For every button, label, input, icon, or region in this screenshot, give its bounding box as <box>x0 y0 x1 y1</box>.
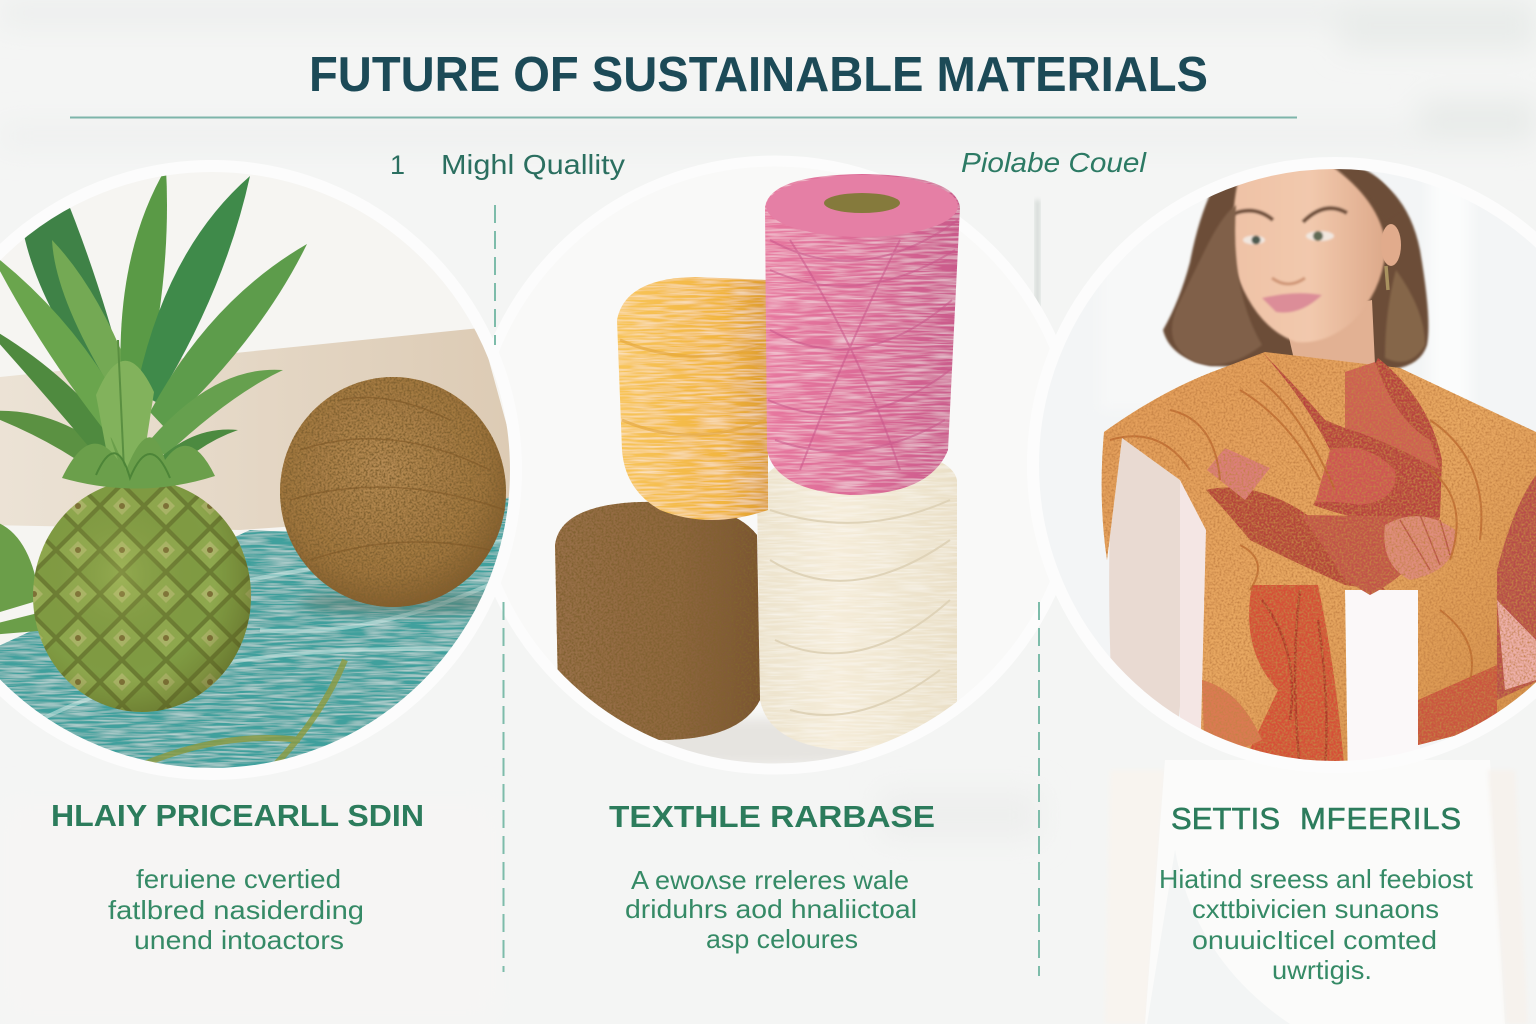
hair back <box>1163 162 1428 370</box>
label: piolabe couel: Piolabe Couel <box>961 147 1147 178</box>
column 2: description: A ewoʌse rreleres wale <box>631 865 909 895</box>
column 3: description: Hiatind sreess anl feebiost <box>1159 864 1474 894</box>
title: FUTURE OF SUSTAINABLE MATERIALS <box>309 48 1208 102</box>
spool: pink yarn <box>765 174 960 495</box>
scarf: red neck fold <box>1262 352 1442 521</box>
hair strands front <box>1172 205 1262 365</box>
panel: left circle, pineapple and coconut fibre <box>0 166 530 790</box>
spool: yellow fibre <box>617 277 768 520</box>
column 3: heading <box>1171 801 1461 836</box>
column 2: heading: TEXTHLE RARBASE <box>609 799 935 834</box>
column 1: description: feruiene cvertied <box>136 864 341 894</box>
figure below portrait: white blouse and sleeve <box>1105 760 1528 1024</box>
scarf: pink ruffle <box>1384 516 1455 580</box>
pineapple body <box>30 478 255 718</box>
column 2: description: asp celoures <box>706 924 858 954</box>
scarf: lower right petal <box>1418 665 1497 745</box>
column 2: description <box>625 865 917 954</box>
coconut fibre ball <box>280 377 506 615</box>
neck <box>1289 300 1375 364</box>
panel: centre circle, textile fibre spools <box>555 156 1041 764</box>
column 1: description: fatlbred nasiderding <box>108 895 364 925</box>
column 2: description: driduhrs aod hnaliictoal <box>625 894 917 924</box>
face <box>1233 163 1400 342</box>
column 1: description: unend intoactors <box>134 925 344 955</box>
scarf: lower left petal <box>1249 585 1344 761</box>
teal woven cloth <box>0 497 509 768</box>
column 1: description <box>108 864 364 955</box>
label: high quality: 1 <box>390 150 405 180</box>
scarf: far right panel <box>1497 470 1536 700</box>
pineapple crown leaves <box>0 168 307 489</box>
green leaf behind fruit <box>0 524 38 634</box>
white top <box>1180 480 1206 729</box>
spool: brown fibre block <box>555 502 760 740</box>
ear and earring <box>1381 224 1401 290</box>
bare sleeve <box>1109 438 1180 716</box>
dashed column dividers <box>495 205 1039 976</box>
scarf: red diagonal band <box>1206 488 1385 590</box>
column 3: description: cxttbivicien sunaons <box>1192 894 1439 924</box>
label: high quality: Mighl Quallity <box>441 149 625 180</box>
column 3: heading: SETTIS <box>1171 801 1280 836</box>
spool: cream fibre <box>757 450 957 751</box>
column 1: heading: HLAIY PRICEARLL SDIN <box>51 798 424 833</box>
column 3: description: onuuicIticel comted <box>1192 925 1437 955</box>
column 3: description <box>1159 864 1474 985</box>
printed scarf <box>1102 352 1536 790</box>
panel: right circle, woman wearing printed scarf <box>1033 160 1536 790</box>
column 3: description: uwrtigis. <box>1272 955 1372 985</box>
wooden table <box>0 328 530 530</box>
column 3: heading: MFEERILS <box>1300 801 1461 836</box>
